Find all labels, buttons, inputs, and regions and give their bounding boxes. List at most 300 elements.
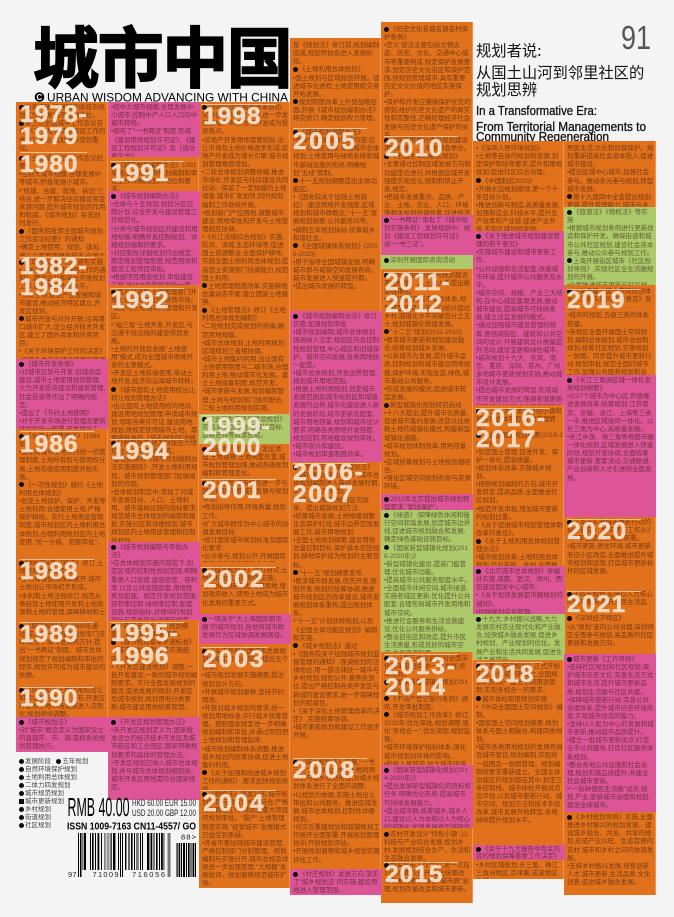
text: 1992: 《城市国有土地使用权出让转让规划管理办法》: [111, 386, 195, 402]
year: 1995-1996: 1995-: [111, 620, 179, 647]
text: 1986: 《全国土地管理法》(1986年): [19, 433, 100, 448]
year: 1978-1979: [20, 101, 88, 150]
panel: green 2013 greenway band: •新型城镇化建设,提高门槛管理,优化城市功能。: [384, 561, 466, 576]
text: 1982-1984: •统筹土地,促进产业发展和城市建设,推动经济特区建立,开发区规划。: [19, 292, 101, 315]
panel: green community law band: [564, 207, 656, 285]
text: top of column 5: [384, 26, 471, 136]
price foreign currencies: [132, 798, 196, 819]
logo mark: C: [36, 93, 42, 102]
text: 2005: •总体规划强化强制性内容;控制中心城区范围,实施城市总体规划,土地使用与绿地系统和城市基础设施的布局,明确规划"五线"管制。: [293, 137, 379, 177]
panel: green 2013 greenway band: 《国家新型城镇化规划(2018-2020年)》: [384, 544, 468, 560]
panel: pink development zone band: •各开发区规划定义为:国家批准设立的经济技术开发区及城市新区和工业园区,国家明确规划要求和具体的管理办法。: [111, 727, 197, 758]
text: 2003: [202, 648, 288, 790]
issue number: 91: [621, 19, 651, 56]
panel: green community law band: 《旅游法》《物权法》等实施: [567, 209, 648, 224]
masthead subtitle and issue heading: [34, 19, 651, 144]
text: 2001: •扩大城市群作为中心城市的协调发展目标;: [202, 521, 289, 536]
logo mark: [35, 92, 44, 102]
legend: planning types: 城市规范规划: [25, 790, 64, 797]
text: 2003: •城市规划发展实施纲要,提出规划设计方向。: [202, 672, 284, 688]
legend: planning types: 二体力四发规划: [25, 782, 70, 789]
text: 2011-2012: •十八大提出,提升城市化质量,促进城市集约发展,改变以往依赖土地的城镇化模式,构建新型城镇化道路。: [384, 410, 470, 442]
panel: pink urban renewal band: •"一刻钟便民生活圈"试点,规划,产业,更新城市治理和规划,建设全球城市。: [567, 786, 650, 809]
text: 1998: •城市总体规划,土地利用规划,区域规划三者相协调。: [202, 340, 286, 355]
year: 1982-1984: 1982-: [20, 253, 88, 280]
text: 1980: 《国务院批转全国城市规划工作会议纪要》的通知: [19, 228, 103, 243]
barcode digits: 97: [68, 870, 76, 879]
text: 2018: 城市体检制度规划实施: [482, 696, 547, 702]
text: 2020: 《关于实施城市更新行动的指导意见》,城市更新工作从2020年全面推进规划部署。: [567, 519, 651, 542]
year: 2011-2012: [385, 272, 450, 316]
text: 1998: 1998年住房制度改革启动,实行住房货币化分配,进一步发展房地产市场,住宅开发成为投资热点。: [202, 104, 288, 135]
text: 2006-2007: •《关于深化土地管理改革的决定》,实施统筹协调。: [293, 708, 380, 723]
panel: pink urban renewal band: •保障城市更新行动,完善公共治理体系,提升城市历史环境风貌,实现城市改造的能力。: [567, 697, 653, 720]
text: 2005: •编制五年规划指标,统筹城乡,和谐社会。: [293, 226, 377, 242]
Chinese issue title: 从国土山河到邻里社区的: [476, 61, 644, 83]
panel: pink 2015 urban work band: 《关于推进城市规划建设管理的若干意见》: [476, 233, 560, 248]
text: 2005: 十一五规划纲要提出主体功能区。: [293, 178, 377, 193]
text: 2006-2007: 《城乡规划法》通过: [299, 643, 358, 650]
text: 2013-2014: •城市环境保护指标体系,强化城市规划对环境的影响。: [384, 744, 466, 760]
year: 1982-1984: [20, 253, 88, 301]
English tagline: URBAN WISDOM ADVANCING WITH CHINA: [47, 90, 288, 104]
legend: planning types: 城市更新规划: [25, 798, 64, 805]
panel: pink urban renewal band: •坚持以人民为中心的发展和城市更新,推动城市品质提升。: [567, 721, 654, 736]
text: 2002: 《城乡规划法》修订研究,土地招标拍卖挂牌制度实施。: [202, 567, 288, 582]
text: 2005: •用于指导全国城镇发展,明确城市群与城镇空间发展布局。城市发展进入快速提升期。: [293, 259, 378, 282]
text: top of column 5: •定义:该法主要包括文物古迹、历史、文化、交通中心城市等重要构成,规定保护发展要求,划定历史文化街区和保护范围,按规划管理城市,具有重要历史文化价值的地区实施保护。: [384, 42, 470, 98]
legend: planning types: [19, 758, 89, 830]
text: 2016-2017: •规划体系改革,实施城乡规划。: [476, 465, 552, 480]
text: urban-rural planning close: [567, 814, 653, 886]
panel: green international plan band: [381, 255, 473, 269]
year: 2015: 2015: [385, 861, 444, 888]
panel: pink 1985 urban development band: 《城市开发条例》: [25, 361, 77, 368]
text: 2011-2012: •城市规划体制改革,用地存量规划。: [384, 443, 466, 458]
legend: planning types: 街道规划: [25, 814, 51, 821]
panel: pink city planning reform band: •城市规划审查制度改革。: [293, 451, 367, 458]
text: 1986: •国家对城市土地实行统一的管理制度,土地所有权与使用权分离,土地有偿使用制度开始实施。: [19, 449, 106, 481]
text: 1982-1984: •《关于环境保护工作的决定》: [19, 348, 106, 355]
text: 2002: [202, 566, 288, 606]
year: 1991: 1991: [111, 160, 170, 187]
year: 2016-2017: [476, 408, 547, 450]
text: 2003: •城市规划编制体系调整,推进城乡规划的统筹协调,促进土地集约利用。: [202, 746, 288, 769]
text: top of column 7: [567, 144, 653, 207]
text: 2006-2007: "十一五"规划纲要发布: [299, 570, 362, 577]
panel: pink urban planning compilation band: [108, 191, 200, 285]
text: 2006-2007: •城市更新规划和建设工作逐步开展。: [293, 724, 380, 739]
panel: pink 1985 urban development band: •对城市区划与开发,旧城改造建设,城市土地使用规划管理,大力开发投资建设和建筑管理,社会投资等作出了明确的规定。: [19, 369, 105, 409]
year: 2002: 2002: [203, 566, 266, 593]
year: 1994: 1994: [111, 438, 170, 465]
panel: pink urban renewal band: 城市更新《工作导则》: [573, 656, 638, 663]
text: 1995-1996: 《城市规划基本术语标准》《城市规划编制办法实施细则》实施。: [111, 639, 195, 662]
Chinese issue title: 规划者说:: [476, 39, 541, 61]
panel: pink 2015 urban work band: •通过加强城市建设管理的统筹,要强调街区、建筑和公共空间的设计,开展建筑设计质量提升活动,建设宜居和绿色城市。: [476, 322, 562, 354]
panel: pink 2015 urban work band: •城市规划十九大、东风、南京、重庆、深圳、苏州、广州多地城市更新规划实践,推动城市设计发展。: [476, 355, 562, 386]
text: 1980: [19, 154, 105, 256]
year: 2021: 2021: [567, 591, 626, 618]
text: 2003: •开放对城乡规划的要求,统一规划用地标准,实行城乡统筹管理。按照国家规定进一步明确规划编制和审批,并通过项目把土地规划和管理起来;: [202, 705, 288, 744]
barcode digits: 716056: [132, 870, 165, 879]
text: 2016-2017: •按照规划编制的方向,城市开发转变,提高品质,全面推进社区规划。: [476, 481, 558, 504]
year: 1999-2000: [203, 413, 271, 461]
text: 2011-2012: 《城市用地分类与规划建设用地标准》,从土地入手提出新型城镇化。: [384, 272, 470, 295]
text: top of column 4: [293, 42, 380, 122]
year: 1978-1979: 1978-: [20, 101, 88, 128]
price and barcode block: RMB 40.00: [68, 792, 130, 822]
panel: green community law band: 上海开展街区城市《社区规划导则》,实现社区全生活圈规划的开展。: [567, 258, 653, 281]
text: 1992: •"福三角"土地开发,开发区,与交通干线沿线的建设得到发展。: [111, 322, 193, 345]
legend: planning types: 乡村规划: [25, 806, 51, 813]
text: 1994: •建设部颁布《城市规划编制办法实施细则》,开发土地利用规划。城市规划管理部门加强规划的作用。: [111, 456, 198, 488]
text: 1998: •二轮规划完成规划的修编,确定用地规模。: [202, 323, 284, 338]
English issue title: In a Transformative Era:: [476, 104, 597, 118]
text: 2011-2012: •土地利用及城市规划体系,规划转型研究,城市人口统计超过乡村,城镇化水平突破百分之五十,规划城镇化快速发展。: [384, 296, 470, 328]
text: 2018: •《中央全国国土空间规划》编制。: [476, 704, 563, 719]
text: top of column 4: 至《规划法》修订前,规划编制完成,规划师协会进入发展阶段。: [293, 42, 379, 65]
panel: pink Yangtze delta band: •长江中游、珠三角等地都市圈一体化规划,区域发展进入快速阶段,规划开发协调,全面统筹城市更新,要素流动,交通联通,产业创新和人才引进的全面发展。: [567, 434, 654, 482]
text: 2016-2017: 十三五:大力发展特色小镇和城市综合体项目,规划管理转变。: [476, 408, 562, 431]
text: 1995-1996: •《开发区建设规划》调整,一批开发建设,一致的城市规划编制要求。实行全面发展规划的建设,促进发展的规划,开发区及城市规划,规划用地分类更新,城市建设用地统筹管理。: [111, 664, 197, 711]
year: 2019: 2019: [567, 287, 626, 314]
price foreign currencies: USD 20.00 GBP 12.00: [132, 808, 196, 819]
text: 2018: [476, 662, 563, 824]
text: 2020: •城市更新,居住环境,城市更新,老旧小区改造,全面推进提升城市规划和运营,打造城市更新标杆的区域发展。: [567, 543, 653, 575]
panel: pink national ecological band: •提出发展新型城镇化的目标和任务,明确优化布局,提高城市可持续发展能力。: [384, 783, 471, 806]
panel: pink urban planning compilation band: •对控制性详细规划作出规定,制定规划管理制度,规范用地和建设工程项目审批。: [111, 250, 197, 273]
legend: planning types: 发展阶段 五年规划: [25, 758, 88, 765]
ISSN: ISSN 1009-7163 CN11-4557/ GO: [67, 822, 196, 832]
text: 1999-2000: 西部大开发战略,开发区清理,土地督察,土地闲置处置,城市规划管理加强,推动各级规划编制和管理变化。: [202, 446, 288, 477]
text: 2001: •修订国家城市规划标准及国际化要求;: [202, 537, 289, 552]
text: 2006-2007: •"十一五"计划改称规划,以及《全国主体功能区规划》编制和实施。: [293, 618, 378, 642]
text: 1978-1979: 改革开放,开展国家级城市规划工作,恢复城市规划地位。: [19, 104, 105, 119]
text: 2013-2014: 《城市规划工作改革》修订,2015年:优化审批,规划调整,强化"多规合一",优化流程,规划监督。: [384, 712, 470, 743]
text: 2011-2012: •以新城市为发展,提升城市品质,控制规划和城市建设用地规模,保护环境,实现生态,绿色,城市基础公共服务。: [384, 353, 470, 385]
text: 2013-2014: [384, 654, 470, 765]
text: 2006-2007: •《国务院关于加强城市规划监督管理的通知》,强调规划的法律地位,用一部法律统一城市与乡村规划,规划公开,督察员到位,提出严格控制各类开发区与新城的建设要求,进一步保障规划的权威性。: [293, 651, 380, 707]
panel: pink urban renewal band: [564, 654, 656, 812]
panel: pink 2017 metropolitan band: •《关于加快发展都市圈规划的通知》。: [476, 592, 563, 608]
panel: pink 2017 metropolitan band: [473, 566, 565, 614]
year: 2011-2012: 2012: [385, 291, 443, 318]
text: 2005: •《国务院关于加强土地调控》,建设用地开发强度,区域规划和城市群概念,"十一五"发展规划纲要,公共服务均等。: [293, 194, 377, 225]
text: 1988: •土地有偿使用改革展开,城市土地出让市场初步形成。: [19, 576, 101, 591]
year: 1988: 1988: [20, 558, 79, 585]
text: 2004: 《物权法》草案公布,城市规划管理与物权保护相结合;严格规划管理工作,特别是重大项目的规划审批。"最严"土地管理制度实施,"经营城市"发展模式日益受到质疑。: [202, 791, 288, 839]
panel: pink 1985 urban development band: •提出了《节约土地使用》: [19, 410, 93, 417]
panel: green 2013 greenway band: •全面城市休闲空间,城市绿道,实施老城区更新,优化提升公共配套,合理布局城市开发用地和城市空间。: [384, 585, 470, 616]
text: 1992: [111, 288, 198, 439]
text: 1980: •"统建、合建、就地、拆旧"三结合,进一步解决住房建设资金来源问题,提升城市规划的作用和权威。《城市规划》杂志创刊发行。: [19, 188, 105, 227]
legend: planning types: 自然环境保护规划: [25, 766, 77, 773]
panel: green international plan band: 深圳开展国际咨询活动: [390, 257, 455, 264]
panel: pink urban renewal band: •支持社区规划和社区规划,保护城市历史文化,完善生活方式和城市生活,提升城市更新品质,规划生活圈与社区共建。: [567, 664, 653, 696]
year: 1995-1996: [111, 620, 179, 670]
panel: pink 2017 metropolitan band: 《北京城市总体规划》修编并实施,成都、武汉、郑州、西安建设国家中心城市。: [476, 568, 562, 591]
panel: pink city planning reform band: •城市总体规划,开发边界管理,规划城市用地范围。: [293, 370, 377, 385]
text: 1998: •规划部门严控用地,调整城市建设,用地审批和开发与土地管理相互协调。: [202, 210, 288, 233]
text: 2006-2007: •城市总体规划,规划层次改革。提出城镇规划方法;: [293, 496, 369, 512]
barcode digits: 71009: [92, 870, 118, 879]
panel: green 2013 greenway band: [381, 510, 473, 652]
text: top of column 7: •提出区域中心城市,加强社会参与。推动多元参与规划,转型城市发展。: [567, 169, 653, 193]
text: 2018: •城市各类用地规划的发展布局及城市管控,规划编制,实现统一底图及一张图管理。规划编制按要求重新建立。全国主体功能区的规划都在其中,划定三条控制线。城市体检开展试点及评估,以及城市更新行动。城市空间、规划方法和技术手段改革,城市发展开始转型,各地持续提升规划水平。: [476, 744, 563, 824]
panel: pink 2015 urban work band: •实施城市建设和城市更新工作。: [476, 249, 556, 264]
text: 1992: •土地的开放及发展"土地使用"模式,成为全国城市用地开发的主要模式。: [111, 346, 193, 369]
year: 2003: 2003: [203, 646, 266, 673]
text: 2011-2012: "十二五"规划(2011-2015): [390, 329, 462, 336]
text: 1998: 《土地管理法》修订《土地利用总体规划编制》: [202, 307, 286, 322]
panel: pink national ecological band: 《国家新型城镇化规划(2014-2020年)》: [384, 767, 468, 782]
text: 1982-1984: 《城市规划条例》颁布实施: [25, 259, 103, 266]
panel: pink 2008 rural planning band: 《村庄规划》发展方向,落实了"城乡规划法"的实施,建设用地进入管理范围。: [293, 871, 379, 894]
year: 2001: 2001: [203, 477, 262, 504]
panel: pink city planning reform band: •根据土地利用规划,划定城市发展范围及城市规划区和城镇发展的边界,城市化建设进入新的发展阶段,城市更新及配套,城市用地存量,规划和城市设计要求,明确各类用地开发强度,规划控制,用地建设规划审批。: [293, 386, 379, 442]
panel: column 2 background: [108, 102, 199, 800]
text: 1992: •确定与土地相关的管理和开发区。: [111, 305, 198, 320]
year: 1995-1996: 1996: [111, 643, 170, 670]
panel: column 3 background: [199, 102, 290, 888]
panel: pink 2015 urban work band: [473, 231, 565, 405]
text: 1998: •城市土地集约利用,出让国有土地使用制度与二级市场,合理利用土地,推动城市化发展。建立土地储备制度,规范开发。: [202, 356, 288, 387]
text: 2001: 加入世贸,城市规划进一步与国际接轨,培育城市发展与规划市场。: [202, 480, 288, 503]
panel: pink city planning reform band: 《城市规划编制办法》修订实施,加强规划审批: [293, 313, 377, 328]
text: top of column 6: •土地等自身的规划和资源,划定保护和培育要求,提升和用地规划,促进社区综合治理。: [476, 153, 562, 176]
text: 2005: 《城市规划编制办法》: [299, 129, 364, 136]
year: 1999-2000: 2000: [203, 434, 262, 461]
panel: column 6 background: [473, 141, 564, 879]
text: 2021: [567, 590, 654, 647]
text: 2010: 《全国主体功能区规划》: [390, 153, 462, 160]
text: 2006-2007: 《物权法》《城乡规划法》《城市规划编制办法》,城市总体规划编制进入新的发展时期,实施"十一五"规划;: [293, 464, 379, 495]
panel: pink 2015 urban work band: •公共设施和生活配套,改善城市环境,提升城市公共服务及水平。: [476, 266, 562, 289]
panel: pink 1990 city planning law band: •对"城市"概念定义为国家设立的直辖市、市、镇,需按系统规划管理执行。: [19, 727, 105, 750]
price foreign currencies: HKD 60.00 EUR 15.00: [132, 798, 196, 809]
panel: column 4 background: [290, 38, 381, 895]
year: 2005: 2005: [293, 128, 358, 155]
text: 2006-2007: •要求城市群发展,优先开发,限制开发;规划的统筹协调,推进城市规划区的改革建设,城市发展规划体系重构,提出规划体系。: [293, 578, 379, 617]
text: 2016-2017: [476, 408, 563, 566]
panel: pink Yangtze delta band: •以27个城市为中心区,积极推进发展改革,统筹规划,江苏南京、安徽、浙江、上海等三省一市,推进区域协同一体化。以长三角为中心,高质量发展。: [567, 393, 653, 433]
text: 1998: •《长江流域综合规划》实施,防洪、流域,生态环境等,促进国土资源整治,全面保护耕地;实施全国土地利用总体规划,提高国土资源部门协调能力,规范国土利用。: [202, 234, 288, 282]
panel: pink top band column 2: [108, 102, 200, 157]
panel: pink urban planning compilation band: •分类与城市规划区的建设和用地规模,明确开发控制规划、详细规划编制的要求。: [111, 226, 198, 249]
text: 2005: 《全国城镇体系规划》(2005-2020): [293, 243, 377, 258]
panel: pink urban planning compilation band: 《城市规划编制办法》: [117, 193, 182, 200]
text: 2008: •以规划为依据,实施土地出让审批和公共服务。推进区域发展;城市总体规划,控制性详细规划。: [293, 792, 378, 823]
English issue title: [476, 104, 646, 144]
panel: pink urban renewal band: •整合各地公共设施和社会治理,规划实施品质提升,共建全社会城市更新。: [567, 762, 649, 785]
text: top of column 4: 《土地利用总体规划》: [299, 66, 364, 73]
year: 2018: 2018: [476, 661, 535, 688]
text: 1998: •房地产开发用地需要招标,出让市场及土地价格逐步形成,房地产开发成为增长引擎,城市规划管理难度增加。: [202, 136, 288, 168]
barcode digits: [68, 870, 165, 879]
text: 2010: •主要通过控制区域发展方向和功能定位进行,并根据区域开发强度实现优化,限制和禁止开发,规定。: [384, 161, 471, 193]
text: top of column 5: 《历史文化名城名镇名村保护条例》: [384, 26, 468, 41]
text: 1995-1996: 十四届五中全会《规划纲要》,提出两个根本转变。: [111, 623, 188, 638]
text: 1980: •控制大城市规模,合理发展中等城市,积极发展小城市。: [19, 171, 101, 186]
text: 2015: 中央城市工作会议,第一次在37年后再次召开,提出统筹改革和发展要求,推进"城市病"治理,规划存量改造和城市更新。: [384, 862, 470, 893]
English issue title: Community Regeneration: [476, 130, 609, 144]
text: top of column 6: [476, 144, 562, 231]
text: urban-rural planning close: •支持乡村振兴发展,培育创新人才,城市更新,生活品质,文化创意,促进城乡融合发展。: [567, 863, 650, 886]
year: 1992: 1992: [111, 287, 170, 314]
text: 1982-1984: •《关于加快城市规划工作的通知》,国家企业和单位开展规划工作,提高居民生活水平。: [19, 267, 106, 290]
text: 1992: •开发区土地有偿使用,带动土地开发,经济向沿海城市转移。: [111, 370, 197, 385]
text: 2003: 《关于开展全国城市总体规划修编工作的通知》,提出五个统筹。: [202, 648, 288, 671]
text: top of column 7: 居民生活,文化和风貌保护。规划重新提高社会资本投入,促进城市建设。: [567, 145, 653, 168]
text: 2016-2017: •划定国土管理,促进开发、保护一体化,提高质量。: [476, 449, 558, 464]
panel: pink urban renewal band: •建立一批城市更新试点;打造全市公共服务,打造社区服务体系规划。: [567, 737, 653, 760]
text: 2006-2007: •统筹城市发展,土地规模调整,生态保护红线,城市边界范围发展工作,城市用地规划;: [293, 513, 379, 536]
panel: column 5 background: [381, 22, 473, 903]
text: top of column 6: •开展长远规划纲领,第一个十年目标计划。: [476, 186, 558, 201]
year: 1989: 1989: [20, 621, 79, 648]
Chinese issue title: [476, 39, 644, 100]
panel: pink one-plan band: "一书两证":审批了《城市规划实施条例》,发展规划中。规划《建设工程规划许可证》由"一书三证"。: [384, 217, 470, 248]
year: 1978-1979: 1979: [20, 123, 79, 150]
text: 2011-2012: •形成发展的模式,促进城市转型发展。: [384, 386, 466, 401]
text: 2021: 《深圳经济特区》: [573, 615, 625, 622]
year: 2013-2014: 2013-: [385, 653, 457, 680]
text: 2008: •开展规划督察和城乡规划实施评估工作。: [293, 848, 380, 864]
text: 2018: •国家国土空间规划纲要,规划体系与国土相融合,构建四类规划。: [476, 720, 562, 743]
text: 1988: [19, 560, 105, 616]
year: 1980: 1980: [20, 151, 79, 178]
text: 2011-2012: •强化区域空间规划布局与资源环境。: [384, 475, 471, 490]
text: 2013-2014: 《不动产登记暂行条例》颁布,开发审批制度。: [384, 696, 468, 711]
panel: pink development zone band: •开发区规划应纳入城市总体规划,并与城市总体规划相衔接。城市开发区用地需符合国家规定。: [111, 760, 198, 791]
panel: pink development zone band: 《开发区规划管理办法》: [117, 719, 188, 726]
year: 2006-2007: 2007: [293, 481, 355, 508]
text: 2001: •规划指导作用,环境质量,规划工作。: [202, 504, 286, 520]
year: 2010: 2010: [385, 135, 444, 162]
legend: planning types: 土地利用总体规划: [25, 774, 77, 781]
text: 1982-1984: 城市开放与对外开放,沿海港口城市扩大,设立经济技术开发区,建立了国外资本和外资项目。: [19, 316, 105, 347]
masthead title: 城市中国: [33, 6, 291, 102]
add-on code 88>: 88>: [181, 832, 197, 842]
text: 2004: [202, 790, 288, 887]
text: 2016-2017: 《关于土地利用总体规划管理办法》: [476, 538, 560, 553]
barcode add-on: [176, 843, 196, 877]
text: 1998: 土地管理制度改革,实施耕地总量动态平衡,建立国家土地督察。: [202, 283, 288, 306]
text: 1978-1979: [19, 104, 105, 152]
text: 2021: 十四五规划,实施以人为核心的城市更新,提升人民生活品质。: [567, 591, 653, 614]
text: 2003: •开展城市规划督察,坚持节约用地。: [202, 689, 284, 704]
text: 1988: 1988年4月《宪法》修订,土地使用权依法转让。: [19, 560, 103, 575]
text: top of column 4: 规划制度改革上升到战略层面,开展《城市规划编制办法》研究修订,确定规划权力管理。: [293, 99, 379, 122]
text: 2010: 《城市用地分类与规划建设用地标准》,上海世博会举办。: [384, 137, 470, 152]
text: 1995-1996: [111, 622, 197, 711]
panel: pink city planning reform band: [290, 311, 382, 462]
text: 2006-2007: [293, 464, 380, 739]
text: 2020: [567, 518, 653, 575]
text: top of column 4: •国土规划与区域规划开展。促进城市化进程,土地使用权交易开始发展。: [293, 74, 380, 98]
year: 2013-2014: [385, 656, 457, 698]
text: urban-rural planning close: 《乡村规划导则》实施,全面推进乡村振兴的规划发展。建设城乡融合、共治、共享的规划,形成产业兴旺、生态宜居的农村,城市和乡村之间的协调发展。: [567, 814, 653, 862]
text: 2019: [567, 288, 652, 376]
panel: pink city planning reform band: •城市设计和建设。: [293, 443, 347, 450]
text: 1978-1979: 第三次全国城市工作会议召开,《关于加强城市建设工作的意见》出台,规划重新受到重视。: [19, 120, 105, 152]
panel: green 2013 greenway band: 《绿道》:保障绿色休闲和慢行空间和谐发展,划定城市边界线,促进城市规划融合和发展,确定绿色基础设施目标。: [384, 512, 470, 543]
text: 1998: [202, 104, 288, 412]
text: 2011-2012: •区域统筹规划与土地规划相结合。: [384, 459, 471, 474]
text: 1998: •二轮总体规划调整修编,推进市场化,开发区与住房建设共同拉动。保留了一定规模的土地储备,城市扩张加快,同时规划编制工作继续开展。: [202, 169, 288, 208]
panel: pink Yangtze delta band: [564, 375, 656, 517]
panel: pink 2015 urban work band: •城市空间、规模、产业三大结构,在中心城区集聚发展,推动城市建设,提高城市可持续发展,建立适宜发展的模式。: [476, 290, 563, 321]
text: 2016-2017: •规范开发审批,增加城市更新的规划比重。: [476, 506, 558, 521]
panel: pink development zone band: [108, 717, 200, 800]
year: 2020: 2020: [567, 518, 628, 545]
year: 2013-2014: 2014: [385, 674, 447, 701]
text: 1989: 《城市规划法》1989年通过,成为第一部城市规划专门法律,确立了城市发展的方针,提出"一书两证"制度。城市总体规划规范了规划编制和审批的程序,规划许可成为城市建设的依据。: [19, 623, 105, 679]
barcode main: [78, 833, 170, 877]
text: 2005: •提出城市发展的转型。: [293, 283, 360, 290]
panel: pink urban planning compilation band: •总体与十五规划,规划分区控制计划,综合开发与建设管理工作规范化。: [111, 201, 197, 224]
year: 2016-2017: 2016-: [476, 405, 547, 432]
year: 1982-1984: 1984: [20, 274, 79, 301]
year: 2016-2017: 2017: [476, 426, 537, 453]
panel: pink 1985 urban development band: [16, 359, 108, 429]
text: top of column 6: •《深圳人居环境规划》: [476, 145, 543, 152]
legend: planning types: 社区规划: [25, 822, 51, 829]
panel: pink 1990 city planning law band: 《城市规划法》: [25, 719, 70, 726]
text: 1980: 《全国城市规划工作会议纪要》: [19, 155, 103, 170]
year: 1998: 1998: [203, 103, 262, 130]
text: 2013-2014: 《国家新型城镇化规划(2014-2020)》: [384, 679, 468, 694]
text: 2011-2012: 新型城镇化规划研究启动: [390, 402, 462, 409]
panel: column 7 background: [564, 141, 656, 895]
text: 2008: 《城乡规划法》实施,"一书三证"制度确立,并将土地利用规划与城乡规划衔接,对城乡规划体系进行了全面的调整;: [293, 759, 379, 790]
panel: pink national ecological band: [381, 765, 473, 828]
text: 1992: 南方谈话后,土地管理部门开展土地招商开发区,培育市场。: [111, 289, 197, 304]
text: 2010: [384, 136, 471, 215]
text: 2019: •城市的规划,五级三类的体系搭建。: [567, 312, 649, 328]
text: 2011-2012: [384, 272, 471, 490]
text: 2004: •各省市要加强城市建设管理,严格控制部门分割管理。规划编制与实施分开,城市总规及详规进一步加强管理,"大规模"发展批评。规划督察规范城市扩张。: [202, 840, 288, 887]
text: top of column 6: 《中国制造2025》: [482, 178, 535, 184]
text: 1982-1984: [19, 258, 106, 359]
panel: pink Yangtze delta band: 《长江三角洲区域一体化发展规划纲要》: [567, 377, 651, 392]
text: 2005: [293, 128, 379, 290]
text: 1986: 《一次性规划》施行《土地利用总体规划》: [19, 482, 103, 497]
year: 2006-2007: 2006-: [293, 459, 365, 486]
English issue title: From Territorial Managements to: [476, 120, 646, 134]
text: 2016-2017: •《关于促进城市规划管理体制改革的意见》。: [476, 522, 563, 537]
panel: green 1999 band: 《全国生态环境建设规划》实施,确定国家生态保护目标,退耕还林等政策形成。: [202, 416, 286, 439]
Chinese issue title: 规划思辨: [476, 78, 537, 100]
text: 2018: 《国土空间规划》正式开始实施,自然资源部成立,全国规划职责,统一国土空间用途管制,实现多规合一的要求。: [476, 663, 560, 694]
panel: pink 1990 city planning law band: [16, 717, 108, 752]
text: 1998: •城市更新与发展,规划编制管理,土地与规划部门协同配合,二轮土地利用规划实施。: [202, 388, 284, 412]
panel: green community law band: •根据城市规划条例进行更新改造和保护开发。确保街道和城市公共社区规划,建设社会资本参与,推动公众参与规划工作。: [567, 225, 654, 257]
text: 2001: [202, 480, 289, 562]
text: 1994: 分税制改革,地方财政压力增加,土地财政开始形成。: [111, 440, 197, 455]
text: 2013-2014: 十八届三中全会提出全面深化改革,提出城乡一体发展,统筹规划。: [384, 655, 468, 678]
text: 2016-2017: 《全国国土规划纲要(2016-2030)》: [476, 432, 563, 448]
year: 2006-2007: [293, 462, 365, 506]
text: 1994: [111, 440, 198, 542]
text: 2002: •土地招拍挂方式,规范用地,增加政府收入,使用土地成为城市化发展的重要方式。: [202, 583, 288, 606]
text: 2006-2007: •全国土地规划纲要,建设用地总量控制目标,保护基本农田规划,耕地保护成为规划的主要目标。: [293, 537, 379, 568]
text: 2008: •对灾后重建规划和城镇规划工作展开全面部署,开展规划管理培训,开放规划评估。: [293, 824, 380, 847]
text: 2008: [293, 758, 380, 864]
year: 2004: 2004: [203, 790, 266, 817]
year: 1999-2000: 1999-: [203, 413, 271, 440]
